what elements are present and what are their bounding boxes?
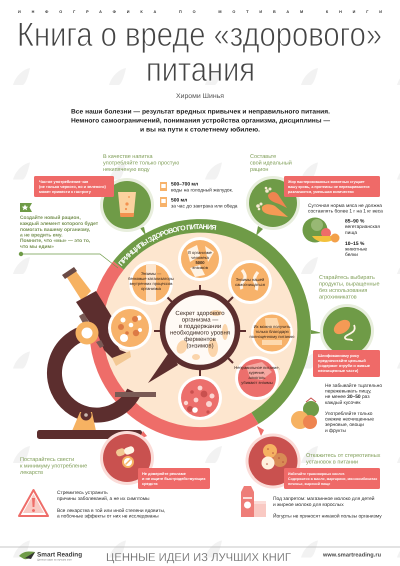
water amount 2 text: за час до завтрака или обеда (171, 204, 238, 210)
medicines text 2: Все лекарства в той или иной степени ядовиты, (57, 508, 165, 514)
whole foods text: и фрукты (325, 428, 346, 434)
callout: tea: (не только черного, но и зеленого) (39, 184, 106, 189)
circle: enzymes are catalysts: организма (141, 286, 162, 291)
website: www.smartreading.ru (322, 552, 382, 558)
callout: trans fats: Избегайте трансжирных кислот. (288, 472, 345, 476)
stat: animal protein: 10–15 % (345, 241, 365, 247)
callout: rice: Шлифованному рису (318, 353, 360, 358)
callout: tea: может привести к гастриту (39, 189, 92, 194)
circle: what kills enzymes: алкоголь (249, 375, 265, 380)
panel: new diet note (19, 203, 118, 268)
circle: getting enzymes (250, 312, 294, 354)
whole foods text: зерновые, овощи (325, 423, 364, 428)
chewing text: пережевывать пищу, (325, 390, 371, 394)
stat: animal protein: белки (345, 252, 358, 258)
icon: star flag (20, 203, 32, 212)
callout: advertising: средств (142, 481, 158, 486)
panel: new diet note: что мы едим» (20, 245, 54, 250)
panel: new diet note: Создайте новый рацион, (20, 215, 81, 221)
circle: cells bottom (178, 376, 222, 420)
organic heading: без использования (319, 287, 367, 294)
icon: pills (115, 445, 135, 468)
callout: tea (34, 176, 114, 197)
title (17, 16, 382, 89)
circle: cells left (108, 306, 152, 350)
water heading: некипяченую воду (103, 167, 150, 173)
circle: top enzymes count: В организме (188, 250, 213, 255)
footer (0, 547, 400, 564)
logo: Ценные идеи из лучших книг (37, 558, 72, 562)
overline: ИНФОГРАФИКА ПО МОТИВАМ КНИГИ (18, 10, 382, 14)
callout: advertising (138, 468, 210, 489)
icon: carrots (256, 187, 288, 217)
diet heading: Составьте (250, 154, 276, 160)
panel: ideal diet (246, 154, 383, 258)
logo (19, 551, 82, 562)
icon: milk (241, 486, 266, 517)
icon: warning triangle (19, 490, 48, 516)
circle: self-cleaning: Энзимы нашей (236, 277, 264, 282)
organic heading: продукты, выращенные (319, 282, 380, 288)
stat: vegetarian food: 85–90 % (345, 218, 365, 224)
organic heading: агрохимикатов (319, 294, 357, 300)
callout: fat (284, 176, 380, 197)
panel: new diet note: Помните, что «мы» — это то, (20, 238, 91, 244)
icon: cookies (262, 444, 287, 470)
circle: top enzymes count: энзимов (192, 265, 208, 270)
diet heading: свой идеальный (250, 160, 292, 166)
icon: water amount 1 (160, 182, 167, 191)
medicines text 1: причины заболеваний, а не их симптомы (57, 496, 150, 502)
callout: trans fats: печенье, жареной пище (288, 482, 330, 486)
icon: vegetables (302, 218, 340, 242)
circle: getting enzymes: полноценному питанию (250, 334, 294, 339)
tagline: ЦЕННЫЕ ИДЕИ ИЗ ЛУЧШИХ КНИГ (106, 552, 292, 564)
callout: trans fats: Содержатся в масле, маргарине, мясокомбинатах (288, 477, 377, 481)
water heading: В качестве напитка (103, 154, 153, 160)
meat norm text: Суточная норма мяса не должна (308, 203, 382, 209)
circle: enzymes are catalysts: белковые катализаторы (128, 276, 174, 281)
callout: rice (313, 350, 380, 377)
title: питания (146, 51, 255, 89)
stereotypes heading: Откажитесь от стереотипных (306, 453, 381, 459)
medicines text 1: Стремитесь устранить (57, 490, 108, 496)
panel: principles ring (90, 219, 311, 441)
medicines heading: лекарств (20, 470, 43, 476)
organic heading: Старайтесь выбирать (319, 274, 375, 281)
hub text: необходимого уровня (170, 330, 230, 336)
panel: new diet note: каждый элемент которого будет (20, 221, 99, 227)
circle: what kills enzymes: курение, (249, 370, 265, 375)
panel: new diet note: а не вредить ему. (20, 234, 63, 238)
circle: top enzymes count: человека (191, 255, 209, 260)
circle: self-cleaning: самоочищаться (235, 282, 265, 287)
lead paragraph: Немного самоограничений, понимания устройства организма, дисциплины — (71, 118, 331, 124)
water amount 1 text: 500–700 мл (171, 182, 198, 188)
stat: animal protein: животные (345, 248, 367, 252)
medicines heading: к минимуму употребление (20, 462, 87, 470)
diet heading: рацион (250, 167, 268, 173)
lead paragraph (71, 108, 331, 134)
callout: rice: предпочитайте цельный (318, 358, 366, 363)
circle: top enzymes count (178, 237, 222, 281)
lead paragraph: Все наши болезни — результат вредных привычек и неправильного питания. (71, 108, 330, 116)
callout: fat: Жир пастеризованных животных сгущает (287, 180, 365, 184)
panel: new diet note: помогать вашему организму, (20, 228, 91, 233)
circle: enzymes are catalysts: внутренних процессов (130, 281, 172, 286)
circle: getting enzymes: Их можно получить (254, 324, 290, 329)
circle: getting enzymes: только благодаря (255, 329, 289, 334)
stat: vegetarian food: пища (345, 231, 357, 236)
circle: what kills enzymes (234, 356, 280, 400)
whole foods text: свежие неочищенные (325, 418, 374, 422)
hub text: организма — (182, 318, 218, 324)
icon: almond (331, 317, 355, 341)
callout: rice: неочищенные части) (318, 368, 359, 373)
callout: rice: (содержит отруби и живые (318, 363, 371, 368)
circle: top enzymes count: 5000 (195, 260, 205, 265)
medicines text 2: а побочные эффекты от них не исследованы (57, 514, 159, 520)
hub text: (энзимов) (186, 342, 214, 350)
chewing text: не менее 30–50 раз (325, 395, 370, 400)
icon: glass of water (118, 192, 136, 217)
water amount 1 text: воды на голодный желудок. (171, 188, 233, 194)
panel: water (34, 154, 238, 236)
water heading: употребляйте только простую (103, 160, 179, 166)
circle: what kills enzymes: Неправильное питание, (234, 365, 280, 370)
center hub (148, 285, 246, 383)
hub text: в поддержании (179, 324, 221, 330)
callout: advertising: и не ищите быстродействующих (142, 476, 206, 481)
hub text: Секрет здорового (175, 310, 225, 317)
circle: self-cleaning (228, 260, 272, 304)
callout: advertising: Не доверяйте рекламе (142, 471, 187, 476)
stat: vegetarian food: вегетарианская (345, 225, 380, 230)
logo: Smart Reading (37, 552, 82, 558)
circle: enzymes are catalysts (128, 261, 174, 305)
icon: water amount 2 (160, 197, 167, 207)
meat norm text: составлять более 1 г на 1 кг веса (308, 208, 383, 214)
whole foods text: Употребляйте только (325, 411, 373, 417)
yogurt text: Йогурты не приносят никакой пользы организму (273, 512, 382, 520)
milk text: Под запретом: магазинное молоко для детей (273, 496, 375, 502)
panel: organic products (291, 274, 382, 434)
stereotypes heading: установок в питании (306, 460, 358, 466)
author: Хироми Шинья (176, 93, 224, 100)
callout: fat: вашу кровь, а протеины не перевариваются (288, 185, 370, 189)
callout: fat: разлагаются, уменьшая количество (288, 190, 355, 194)
microscope (37, 267, 156, 439)
circle: enzymes are catalysts: Энзимы — (141, 271, 162, 276)
lead paragraph: и вы на пути к столетнему юбилею. (140, 126, 260, 134)
callout: tea: Частое употребление чая (39, 179, 88, 184)
circle: what kills enzymes: убивают энзимы (241, 380, 273, 385)
panel: medicines (19, 431, 210, 520)
callout: trans fats (284, 468, 380, 489)
panel: stereotypes (241, 426, 382, 520)
chewing text: Не забывайте тщательно (325, 383, 382, 389)
medicines heading: Постарайтесь свести (20, 456, 74, 463)
icon: fruits (291, 398, 319, 429)
chewing text: каждый кусочек (325, 400, 361, 406)
water amount 2 text: 500 мл (171, 198, 187, 204)
milk text: и жирное молоко для взрослых (273, 503, 344, 508)
hub text: ферментов (184, 336, 216, 343)
ring heading: ПРИНЦИПЫ ЗДОРОВОГО ПИТАНИЯ (118, 224, 216, 266)
